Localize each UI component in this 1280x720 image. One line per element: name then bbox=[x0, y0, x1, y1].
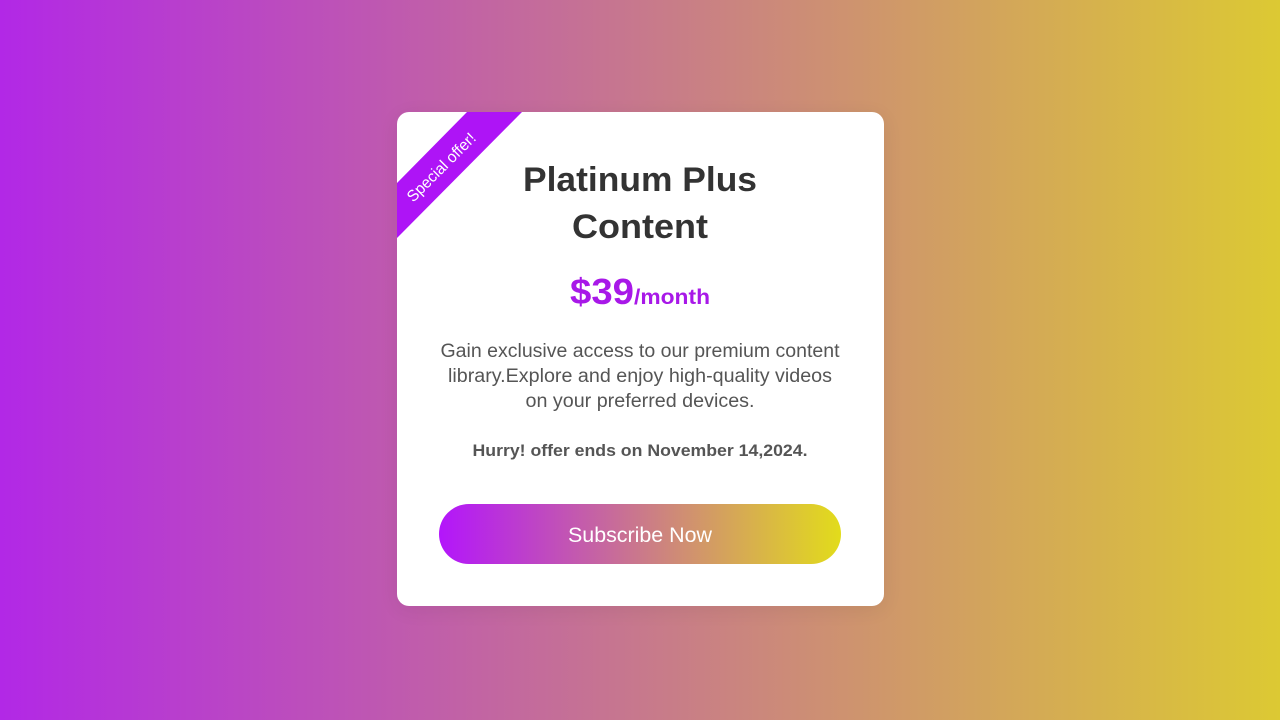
ribbon: special offer: Special offer! bbox=[404, 130, 480, 206]
button: subscribe now: Subscribe Now bbox=[568, 524, 713, 547]
heading: plan title: Content bbox=[572, 208, 708, 246]
price: /month bbox=[634, 286, 710, 309]
description text: library.Explore and enjoy high-quality videos bbox=[448, 366, 832, 387]
price bbox=[570, 271, 710, 312]
description text bbox=[440, 341, 840, 412]
ribbon: special offer bbox=[397, 112, 522, 238]
price: $39 bbox=[570, 271, 634, 312]
heading: plan title bbox=[523, 161, 757, 246]
description text: Gain exclusive access to our premium content bbox=[440, 341, 840, 362]
offer deadline: Hurry! offer ends on November 14,2024. bbox=[472, 441, 808, 460]
button: subscribe now bbox=[439, 504, 841, 564]
heading: plan title: Platinum Plus bbox=[523, 161, 757, 199]
panel: offer card bbox=[397, 112, 884, 606]
description text: on your preferred devices. bbox=[526, 391, 754, 412]
